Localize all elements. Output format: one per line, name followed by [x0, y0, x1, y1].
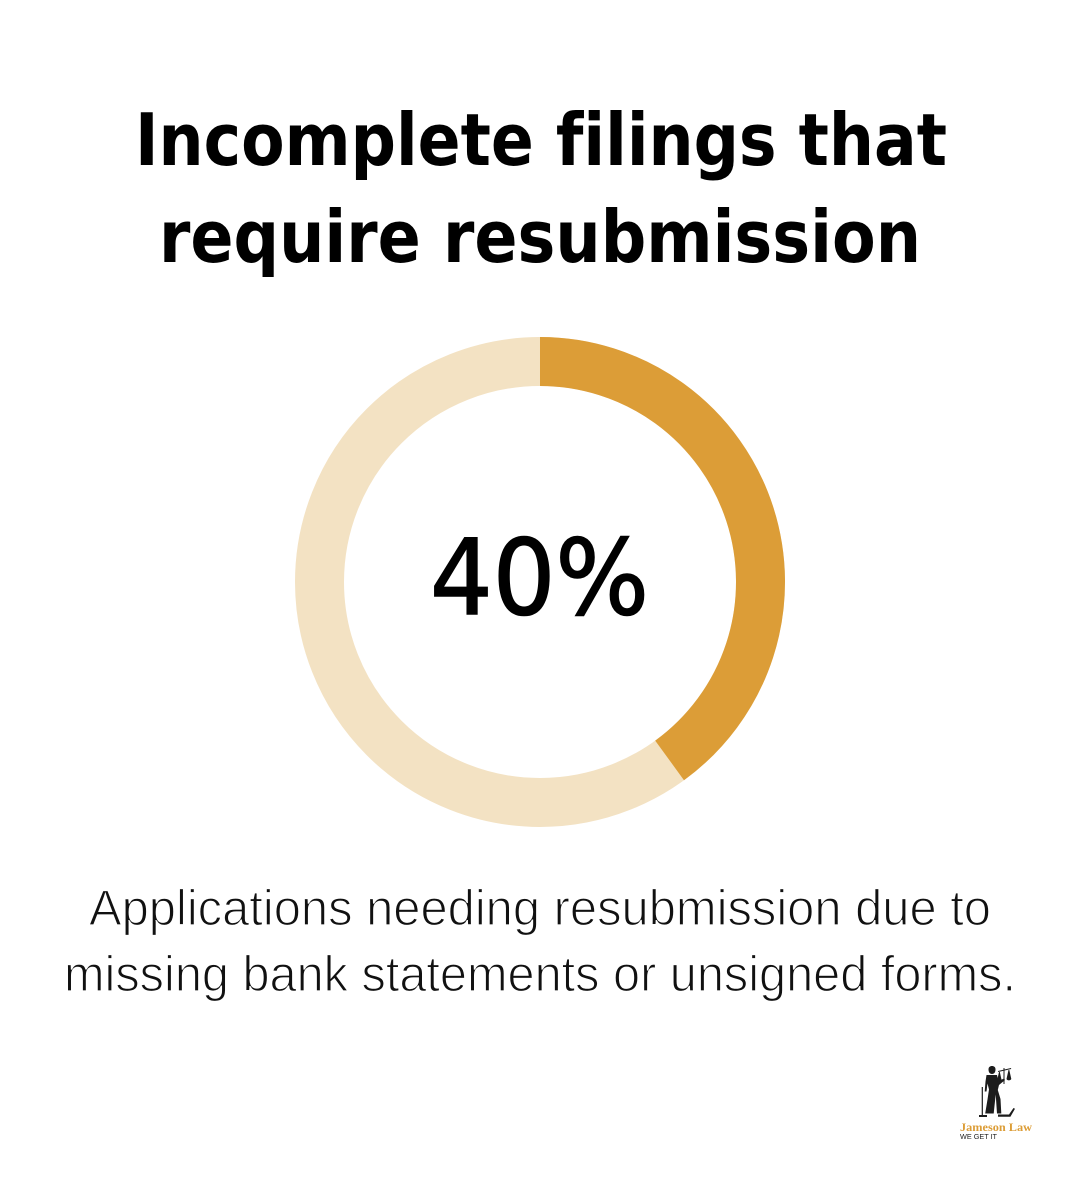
- tagline: WE GET IT: [960, 1134, 998, 1141]
- description: [64, 880, 1016, 1002]
- donut chart: 40%: [320, 362, 761, 802]
- description: Applications needing resubmission due to: [89, 880, 991, 936]
- title: [135, 98, 947, 279]
- logo: Jameson Law: [960, 1066, 1033, 1141]
- brand name: Jameson Law: [960, 1122, 1033, 1134]
- title: require resubmission: [159, 195, 921, 279]
- center value: 40%: [430, 517, 649, 639]
- icon: lady justice: [979, 1066, 1015, 1117]
- title: Incomplete filings that: [135, 98, 947, 182]
- description: missing bank statements or unsigned forms.: [64, 946, 1016, 1002]
